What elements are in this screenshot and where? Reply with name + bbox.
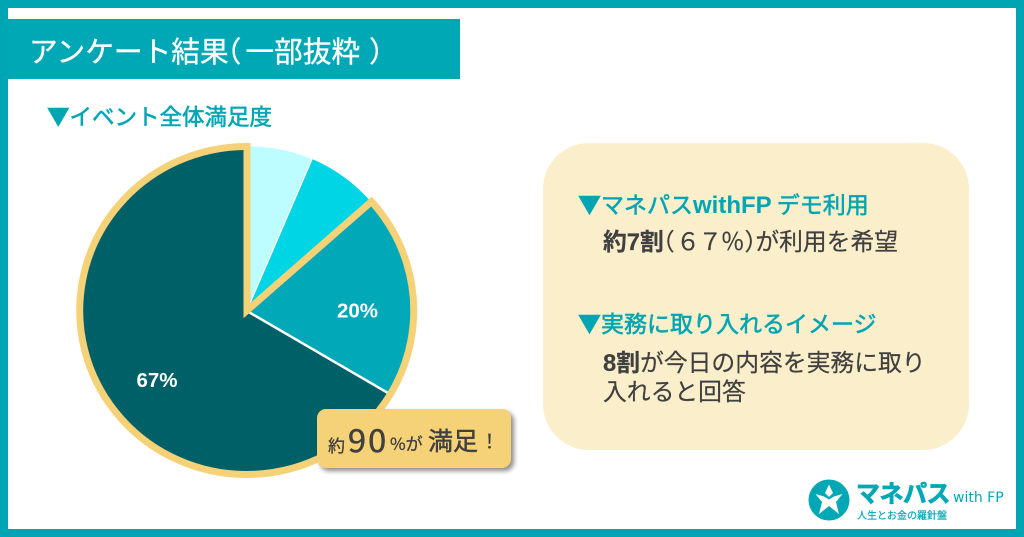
callout: about 90% satisfied bbox=[317, 409, 511, 468]
callout text: 90 bbox=[348, 416, 388, 461]
logo: manepass with FP bbox=[808, 474, 1004, 522]
highlight outline bbox=[80, 146, 414, 474]
heading: demo use: ▼マネパスwithFP デモ利用 bbox=[578, 186, 869, 220]
text: practical use result: 入れると回答 bbox=[603, 372, 746, 407]
logo wordmark: マネパス bbox=[856, 474, 950, 509]
title text: アンケート結果（一部抜粋 ） bbox=[29, 30, 398, 71]
panel: survey findings bbox=[543, 143, 969, 450]
heading: event satisfaction: ▼イベント全体満足度 bbox=[47, 100, 272, 132]
text: practical use result: 8割が今日の内容を実務に取り bbox=[603, 343, 926, 378]
title banner bbox=[8, 19, 460, 79]
slice: light cyan bbox=[247, 145, 312, 310]
label: 20%: 20% bbox=[337, 300, 378, 322]
callout text: 満足 bbox=[428, 422, 478, 458]
text: practical use result bbox=[603, 343, 926, 407]
text: demo use result: 約7割（６７％）が利用を希望 bbox=[603, 222, 898, 257]
logo tagline: 人生とお金の羅針盤 bbox=[857, 507, 947, 522]
callout text: %が bbox=[390, 430, 423, 455]
slice: 67% dark teal bbox=[81, 146, 391, 474]
icon: compass mark bbox=[808, 480, 850, 520]
heading: practical use: ▼実務に取り入れるイメージ bbox=[578, 305, 877, 339]
logo suffix: with FP bbox=[953, 490, 1004, 506]
label: 67%: 67% bbox=[136, 369, 178, 392]
callout text bbox=[328, 416, 499, 461]
slice divider bbox=[247, 311, 388, 393]
callout text: ！ bbox=[480, 427, 499, 454]
slice: 20% teal bbox=[247, 202, 414, 395]
slice: cyan bbox=[247, 158, 372, 310]
callout text: 約 bbox=[328, 432, 345, 457]
